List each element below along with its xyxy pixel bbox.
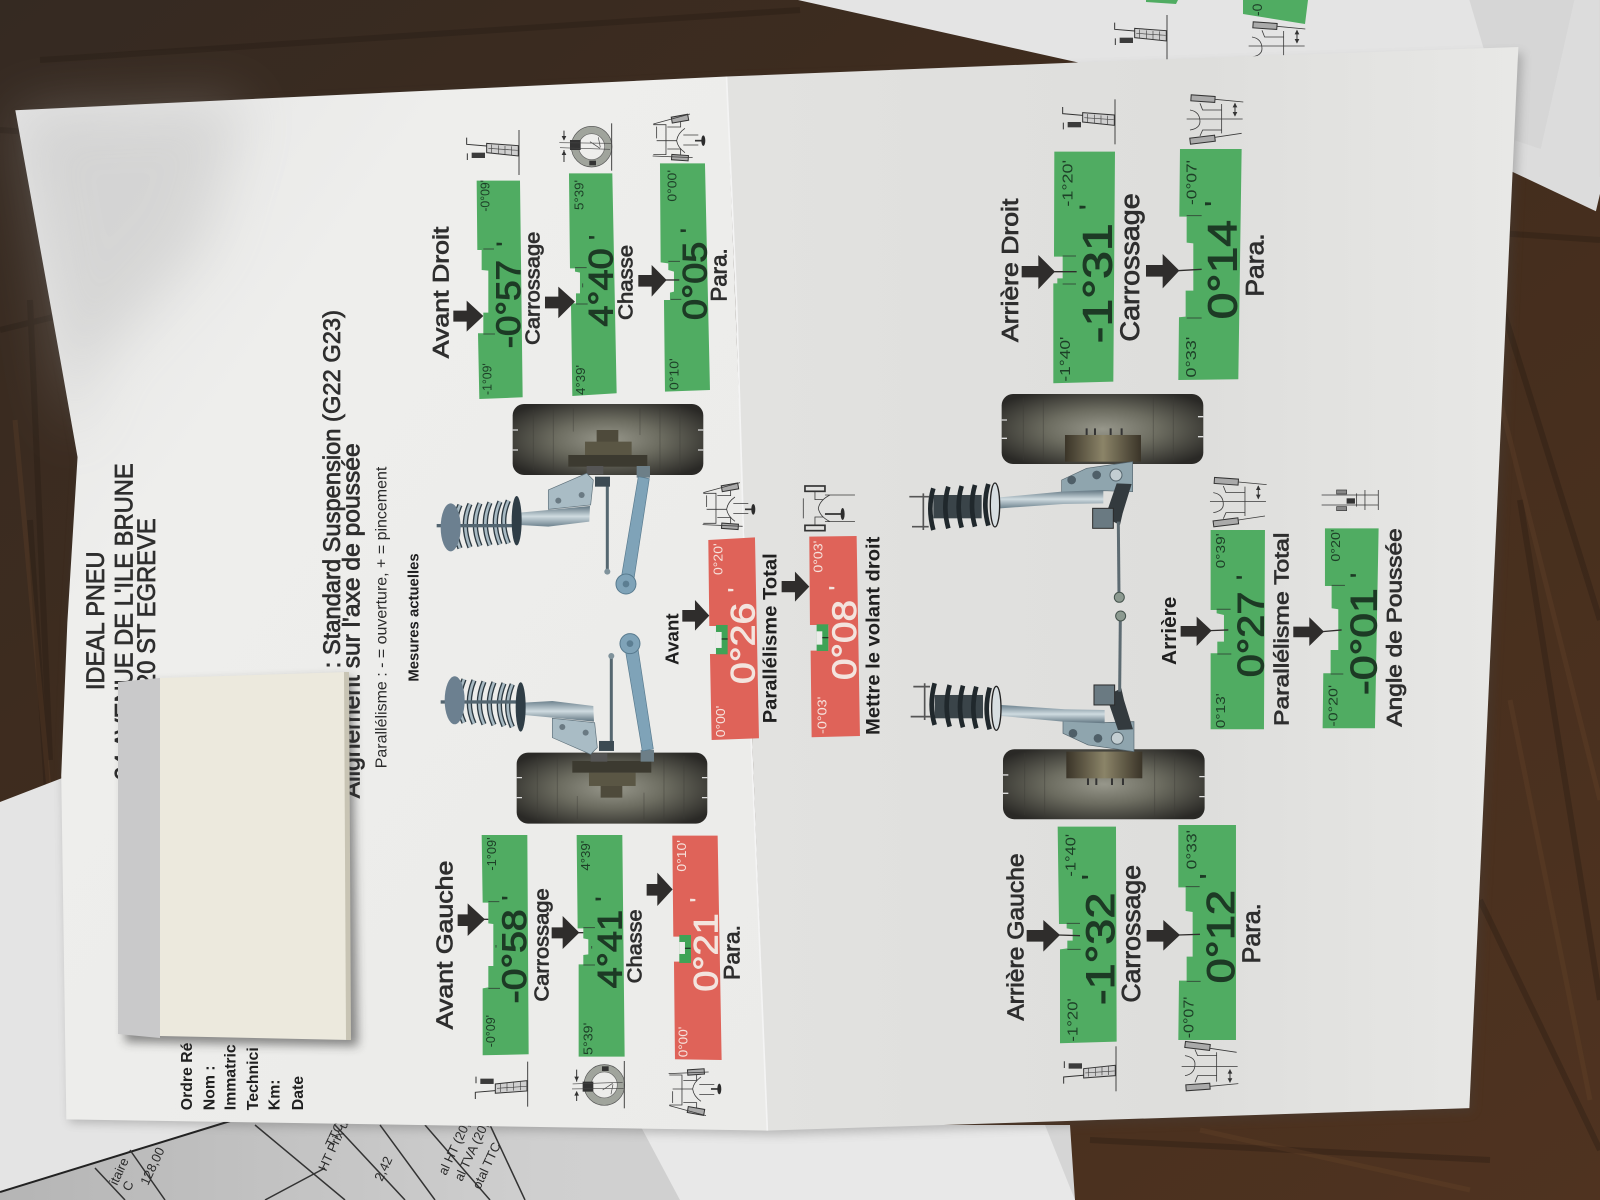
garage name: IDEAL PNEU xyxy=(83,552,110,690)
gauge: carrossage xyxy=(1027,827,1123,1043)
gauge: para xyxy=(1147,825,1243,1040)
label: chasse: Chasse xyxy=(624,909,647,983)
heading: arriere droit: Arrière Droit xyxy=(997,198,1023,342)
icon: front toe xyxy=(703,483,755,530)
gauge: carrossage: -0°09' xyxy=(484,1015,498,1047)
background papers top right xyxy=(798,0,1600,211)
gauge: carrossage: -0°09' xyxy=(478,180,492,212)
rear suspension left xyxy=(911,611,1205,819)
label: parallelisme total: Parallélisme Total xyxy=(1270,533,1293,726)
label: angle de poussee: Angle de Poussée xyxy=(1383,528,1407,727)
front suspension left xyxy=(441,634,707,824)
label: avant: Avant xyxy=(661,613,682,665)
customer information labels xyxy=(179,1042,307,1110)
icon: camber xyxy=(475,1062,528,1107)
gauge: parallelisme: ' xyxy=(678,229,700,233)
front suspension right xyxy=(437,404,703,594)
gauge: chasse: 5°39' xyxy=(582,1023,596,1055)
gauge: carrossage xyxy=(458,835,534,1055)
bottom invoice sheet: otal TTC xyxy=(469,1140,504,1191)
gauge: chasse: ' xyxy=(586,235,608,239)
gauge: para: 0°14 xyxy=(1200,220,1246,319)
gauge: total toe red: 0°26 xyxy=(724,603,762,684)
gauge: rear total toe: ' xyxy=(1234,575,1256,579)
gauge: para: 0°12 xyxy=(1199,890,1243,983)
gauge: thrust angle: ' xyxy=(1348,573,1370,577)
bottom invoice sheet: 128,00 xyxy=(137,1145,168,1187)
alignment type: Alignement sur l'axe de poussée xyxy=(338,443,365,798)
panel: rear axle and thrust angle xyxy=(909,394,1407,819)
gauge: total toe red: 0°00' xyxy=(714,706,728,737)
gauge: chasse xyxy=(552,835,630,1057)
gauge: parallelisme red: 0°21 xyxy=(687,913,725,992)
gauge: total toe red xyxy=(682,537,762,740)
gauge: total toe red: ' xyxy=(726,588,748,592)
bottom left white paper xyxy=(0,775,270,1200)
gauge: para: 0°33' xyxy=(1184,336,1200,378)
label: parallelisme total: Parallélisme Total xyxy=(761,553,782,723)
partial gauges on the page behind: -0 xyxy=(1249,3,1265,16)
icon: thrust angle xyxy=(1322,490,1378,511)
toe legend: Parallélisme : - = ouverture, + = pincement xyxy=(374,466,391,768)
gauge: carrossage: -1°09' xyxy=(485,837,499,871)
gauge: carrossage: -1°20' xyxy=(1065,998,1081,1042)
icon: toe xyxy=(669,1069,721,1116)
gauge: para xyxy=(1146,149,1246,380)
gauge: parallelisme red: 0°10' xyxy=(675,840,689,872)
gauge: carrossage xyxy=(453,180,528,399)
gauge: steering wheel red xyxy=(782,536,864,737)
gauge: carrossage xyxy=(1022,152,1121,383)
label: chasse: Chasse xyxy=(614,245,637,320)
label: para: Para. xyxy=(1239,903,1266,963)
customer information labels: Immatric xyxy=(223,1044,240,1110)
icon: caster xyxy=(559,123,612,171)
gauge: carrossage: -0°57 xyxy=(490,260,528,348)
gauge: rear total toe xyxy=(1181,530,1271,729)
gauge: rear total toe: 0°13' xyxy=(1213,693,1228,728)
gauge: chasse: 4°39' xyxy=(574,365,588,395)
gauge: parallelisme: 0°05 xyxy=(677,242,715,320)
gauge: rear total toe: 0°27 xyxy=(1229,592,1271,677)
heading: avant gauche: Avant Gauche xyxy=(432,861,458,1029)
heading: avant droit: Avant Droit xyxy=(428,227,453,358)
rear suspension right xyxy=(909,394,1203,602)
customer information labels: Technici xyxy=(245,1047,262,1110)
gauge: carrossage: -1°09' xyxy=(481,363,495,395)
bottom invoice sheet: C xyxy=(119,1178,137,1193)
gauge: chasse: 5°39' xyxy=(572,180,586,210)
icon: toe xyxy=(653,114,705,161)
gauge: thrust angle: -0°20' xyxy=(1325,685,1340,727)
icon: camber xyxy=(467,130,519,175)
icon: camber xyxy=(1064,1046,1116,1091)
customer information labels: Km: xyxy=(267,1079,284,1110)
gauge: steering wheel red: 0°03' xyxy=(812,541,826,573)
panel: arriere gauche xyxy=(1002,825,1266,1091)
gauge: para: ' xyxy=(1201,202,1227,206)
customer information labels: Date xyxy=(290,1076,307,1110)
gauge: carrossage: -1°32 xyxy=(1079,893,1123,1005)
current measures heading: Mesures actuelles xyxy=(406,553,422,682)
garage city: 38120 ST EGREVE xyxy=(134,518,161,727)
gauge: chasse: ' xyxy=(593,897,615,901)
bottom invoice sheet: 2,42 xyxy=(371,1154,395,1183)
gauge: parallelisme: 0°00' xyxy=(666,170,680,202)
gauge: chasse: 4°40 xyxy=(583,248,621,327)
panel: avant gauche xyxy=(432,835,744,1116)
label: carrossage: Carrossage xyxy=(1116,865,1146,1003)
gauge: carrossage: -1°31 xyxy=(1075,223,1121,343)
vehicle suspension: : Standard Suspension (G22 G23) xyxy=(319,310,346,668)
label: para: Para. xyxy=(719,925,744,980)
gauge: carrossage: -1°40' xyxy=(1058,336,1074,382)
icon: toe xyxy=(1187,95,1243,144)
gauge: chasse xyxy=(545,173,621,396)
gauge: thrust angle: 0°20' xyxy=(1328,529,1343,562)
gauge: para: -0°07' xyxy=(1181,996,1197,1038)
gauge: carrossage: ' xyxy=(500,896,522,900)
panel: arriere droit xyxy=(997,95,1269,383)
label: arriere: Arrière xyxy=(1159,597,1181,665)
garage street: 24 AVENUE DE L'ILE BRUNE xyxy=(112,463,139,780)
gauge: parallelisme red: 0°00' xyxy=(677,1027,691,1057)
gauge: parallelisme red xyxy=(647,836,725,1060)
gauge: carrossage: -1°40' xyxy=(1064,834,1080,877)
gauge: parallelisme red: ' xyxy=(687,898,709,902)
bottom invoice sheet xyxy=(0,1098,1075,1200)
gauge: chasse: 4°39' xyxy=(579,841,593,871)
gauge: parallelisme: 0°10' xyxy=(667,358,681,390)
gauge: rear total toe: 0°39' xyxy=(1213,533,1228,568)
panel: avant droit xyxy=(428,114,732,399)
bottom invoice sheet: HT Prix unita xyxy=(315,1098,361,1173)
label: carrossage: Carrossage xyxy=(1115,193,1145,342)
gauge: steering wheel red: -0°03' xyxy=(816,697,830,734)
label: carrossage: Carrossage xyxy=(530,888,553,1002)
gauge: para: -0°07' xyxy=(1185,160,1201,205)
gauge: steering wheel red: ' xyxy=(826,586,848,590)
customer information labels: Nom : xyxy=(201,1065,218,1110)
icon: camber xyxy=(1063,99,1115,144)
gauge: total toe red: 0°20' xyxy=(711,543,725,575)
gauge: carrossage: -1°20' xyxy=(1060,160,1076,207)
panel: front axle and total toe xyxy=(437,404,884,824)
gauge: carrossage: -0°58 xyxy=(496,909,534,1003)
gauge: carrossage: ' xyxy=(494,242,516,246)
customer information labels: Ordre Ré xyxy=(179,1042,196,1110)
gauge: thrust angle: -0°01 xyxy=(1343,588,1385,695)
partial gauges on the page behind xyxy=(1115,0,1308,71)
icon: steering wheel xyxy=(803,486,855,531)
gauge: parallelisme xyxy=(638,163,715,392)
bottom invoice sheet: TTC xyxy=(322,1120,346,1149)
gauge: steering wheel red: 0°08 xyxy=(826,600,864,680)
icon: rear toe xyxy=(1210,477,1267,527)
bottom invoice sheet: al TVA (20, xyxy=(451,1120,491,1183)
gauge: para: 0°33' xyxy=(1185,830,1201,869)
gauge: carrossage: ' xyxy=(1075,205,1101,209)
bottom invoice sheet: itaire xyxy=(106,1155,132,1187)
label: para: Para. xyxy=(1241,233,1269,297)
icon: toe xyxy=(1182,1041,1238,1091)
icon: caster xyxy=(572,1061,625,1108)
gauge: carrossage: ' xyxy=(1077,875,1103,879)
label: para: Para. xyxy=(707,248,732,302)
masking sticker xyxy=(118,672,358,1046)
gauge: para: ' xyxy=(1196,874,1222,879)
label: carrossage: Carrossage xyxy=(521,232,544,345)
gauge: thrust angle xyxy=(1293,528,1385,728)
label: mettre le volant droit: Mettre le volant droit xyxy=(863,536,884,735)
bottom invoice sheet: al HT (20,00 xyxy=(435,1106,479,1177)
heading: arriere gauche: Arrière Gauche xyxy=(1002,853,1028,1021)
header: garage address and alignment title xyxy=(83,310,422,798)
gauge: chasse: 4°41 xyxy=(592,910,630,988)
